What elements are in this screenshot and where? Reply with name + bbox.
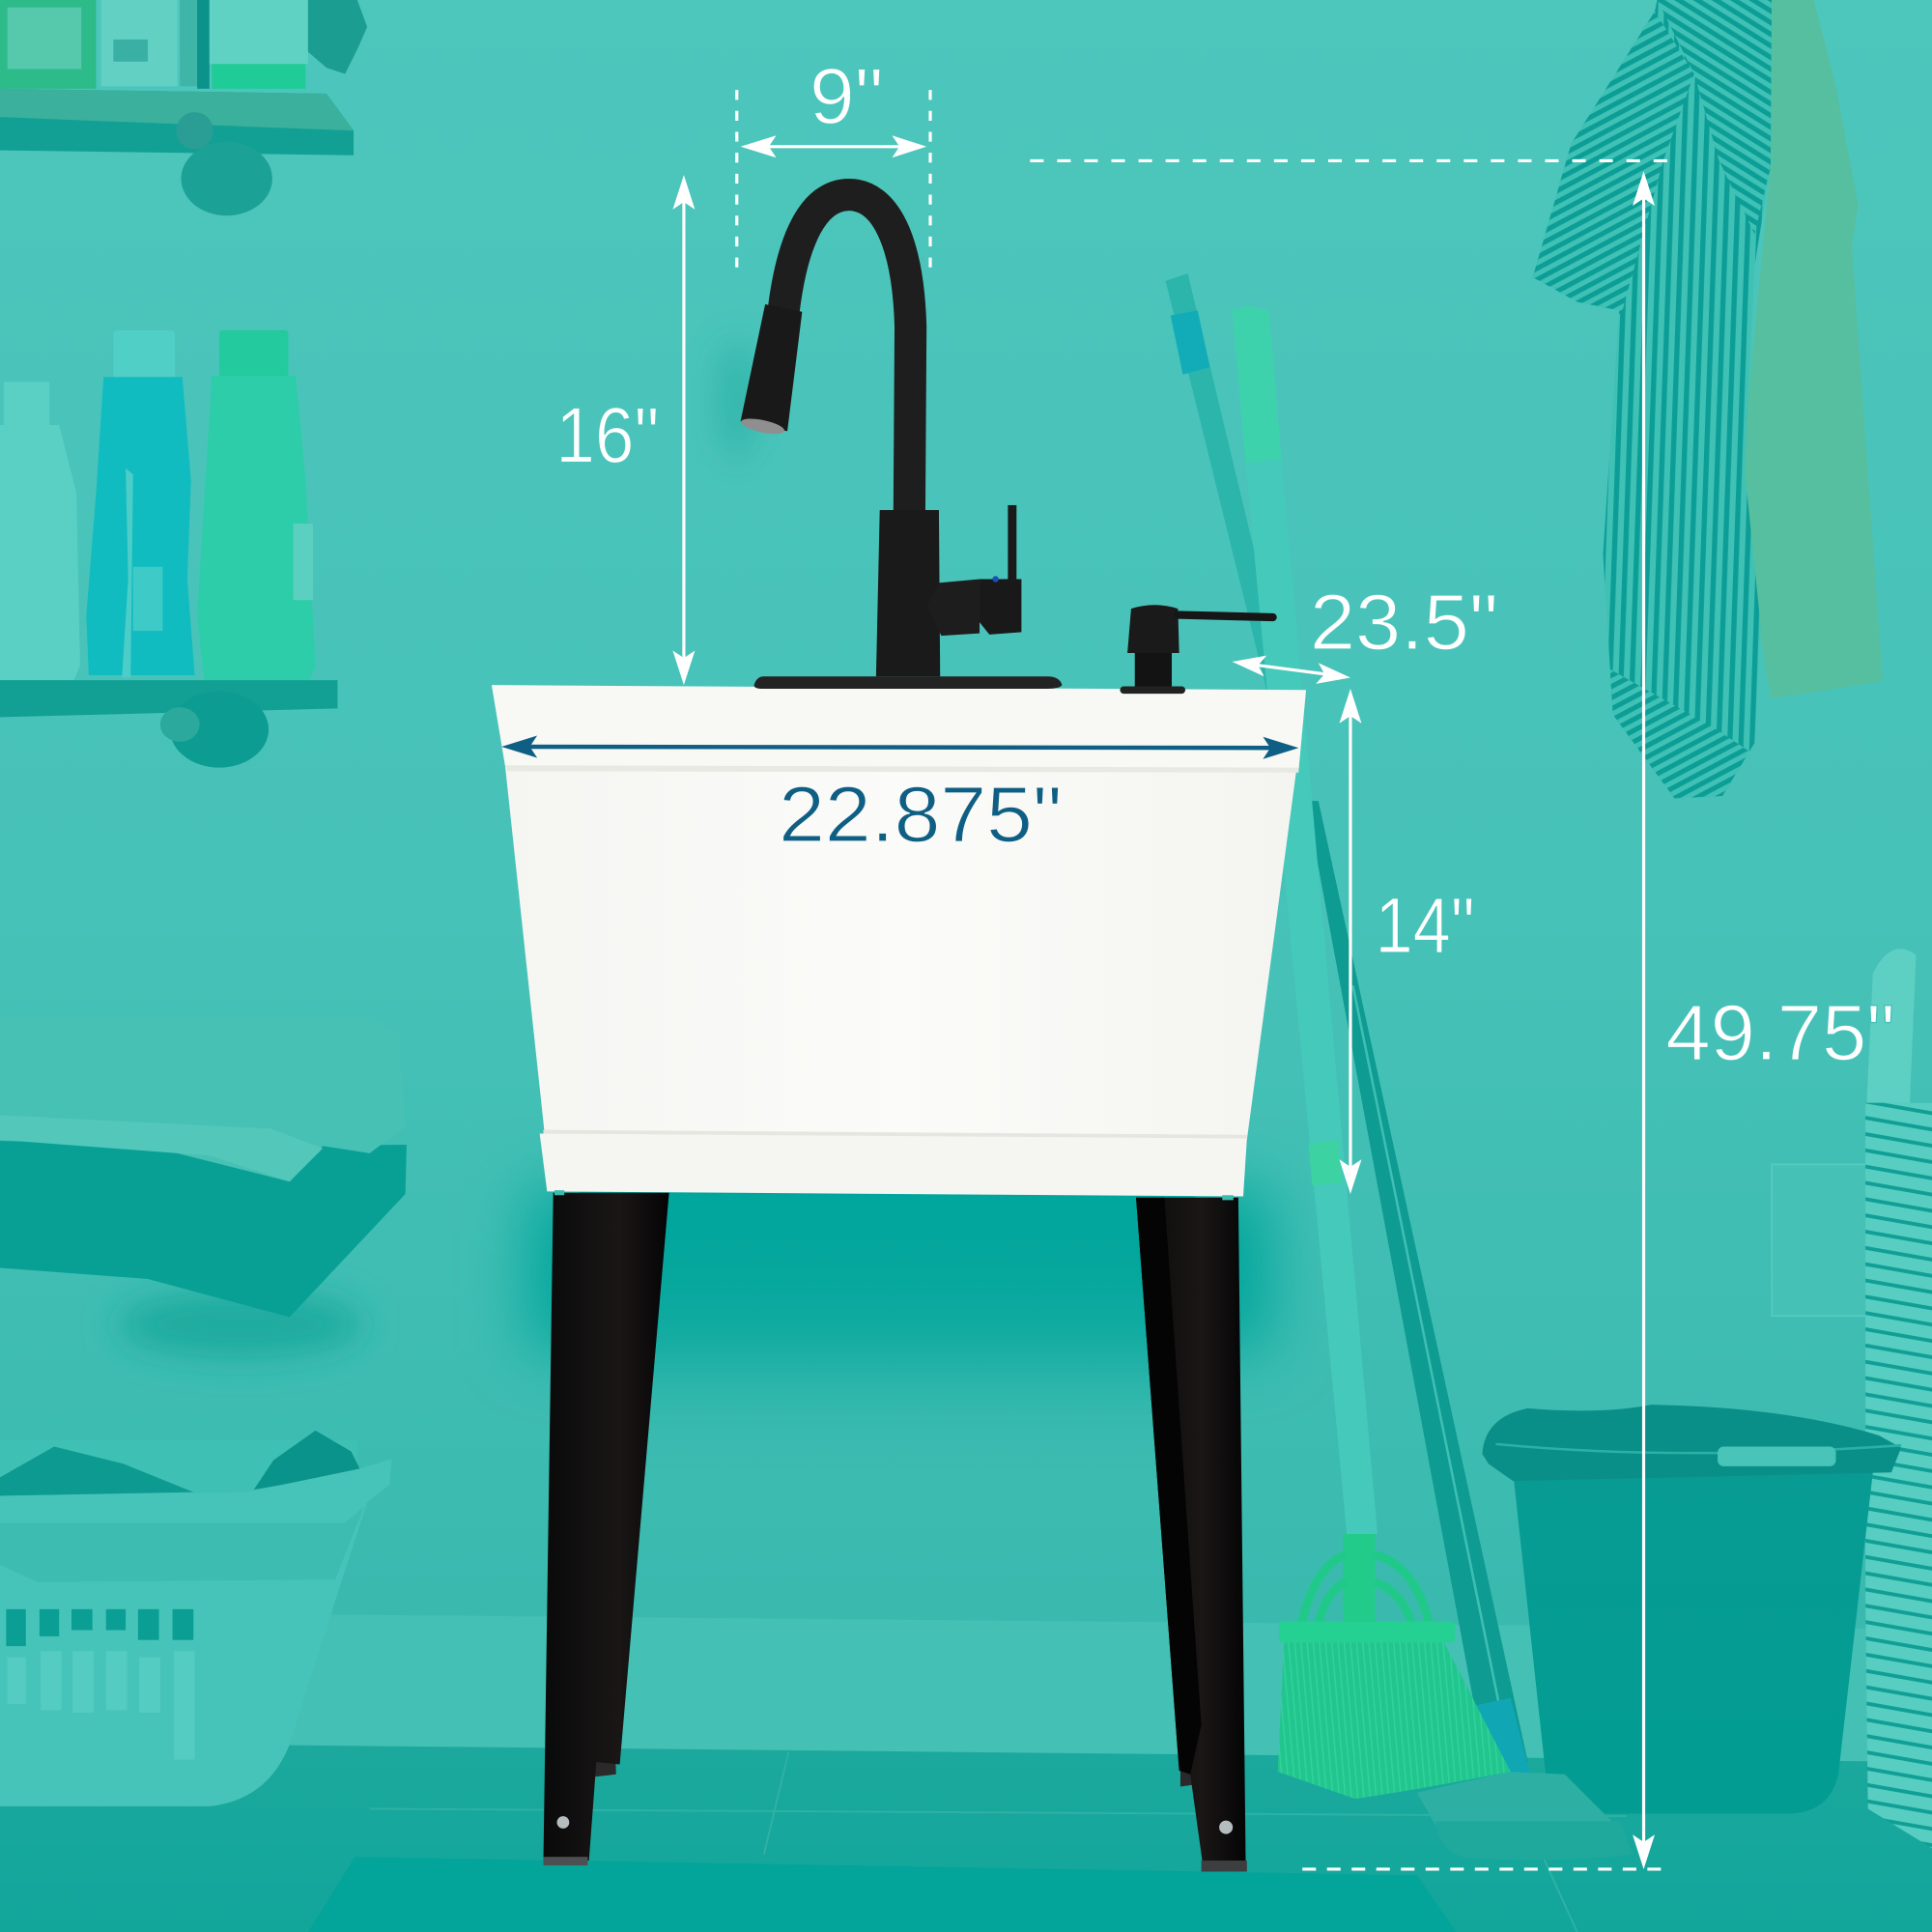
spray head (741, 304, 802, 431)
bucket handle (1718, 1446, 1836, 1466)
towel stack (0, 1015, 407, 1356)
deck plate (754, 676, 1062, 689)
shelf bracket (182, 142, 272, 215)
dimension: width 22.875 inches (501, 735, 1298, 859)
broom neck (1343, 1534, 1375, 1627)
clothes (0, 1446, 193, 1495)
dimension: faucet reach 9 inches (737, 53, 930, 273)
shelf board (0, 680, 337, 717)
green bottle (197, 330, 316, 683)
bottle tops (0, 0, 308, 89)
mop bucket (1482, 1405, 1901, 1814)
green broom (1233, 305, 1511, 1799)
basket holes (6, 1609, 193, 1646)
dimension: faucet height 16 inches: 16" (555, 391, 659, 479)
blue bottle (86, 330, 195, 678)
dimension: width 22.875 inches: 22.875" (779, 771, 1062, 859)
faucet body (876, 510, 940, 676)
sink shadow on wall (529, 1189, 1269, 1485)
dimension: faucet height 16 inches (555, 175, 695, 685)
upper shelf with bottles (0, 0, 367, 215)
sink basin (492, 685, 1306, 1200)
striped shirt (1528, 0, 1775, 813)
broom band (1309, 1140, 1342, 1185)
handle (926, 579, 980, 636)
floor rug (308, 1857, 1457, 1932)
mop stick (1166, 273, 1288, 690)
lower shelf with bottles (0, 330, 337, 768)
dimension: overall height 49.75 inches: 49.75" (1665, 989, 1895, 1077)
right leg (1136, 1198, 1247, 1872)
mop joint (1476, 1698, 1530, 1781)
dimension: overall height 49.75 inches (1030, 160, 1895, 1869)
faucet shadow (720, 341, 754, 460)
broom plate (1279, 1622, 1455, 1642)
gooseneck spout (783, 195, 911, 518)
broom ribs (1301, 1555, 1430, 1624)
mop grip (1171, 310, 1210, 375)
wall socket plate (1772, 1164, 1868, 1316)
sweater (1739, 0, 1883, 698)
dimension: basin depth 14 inches: 14" (1375, 882, 1475, 970)
white bottle (0, 382, 80, 680)
mop head (1417, 1772, 1633, 1860)
soap dispenser (1120, 605, 1273, 694)
dimension: basin depth 14 inches (1339, 689, 1475, 1194)
striped cloth on hook (1865, 949, 1932, 1848)
shelf board (0, 89, 354, 156)
shelf bracket (170, 692, 269, 768)
floor (0, 1743, 1932, 1932)
dimension: faucet reach 9 inches: 9" (810, 53, 884, 141)
faucet (740, 195, 1062, 689)
dimension: depth 23.5 inches (1233, 579, 1498, 684)
broom handle (1233, 305, 1282, 464)
left leg (543, 1193, 669, 1865)
dimension: depth 23.5 inches: 23.5" (1310, 579, 1498, 667)
bristles (1278, 1642, 1511, 1799)
plant (308, 0, 367, 74)
laundry basket (0, 1431, 392, 1806)
baseboard (0, 1611, 1932, 1765)
faucet legs and sink unit (492, 195, 1306, 1871)
blue mop (1166, 273, 1633, 1860)
